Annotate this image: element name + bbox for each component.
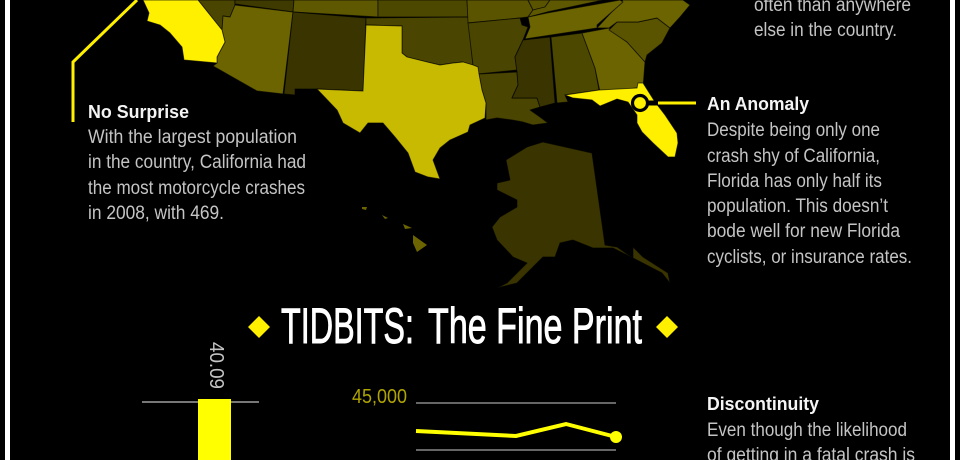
section heading: Tidbits: TIDBITS:: [281, 298, 414, 354]
callout: No Surprise: No Surprise: [88, 101, 189, 122]
state: Mississippi: [512, 37, 555, 107]
state: California: [143, 0, 225, 63]
bar chart: 40.09: [205, 342, 227, 389]
state: Arkansas: [468, 18, 528, 74]
state: Georgia: [582, 28, 645, 92]
state: Louisiana: [479, 72, 548, 125]
text block: top right fragment: else in the country.: [754, 20, 897, 41]
left white frame border: [5, 0, 10, 460]
state: Alaska: [492, 142, 670, 288]
state: Alabama: [551, 33, 599, 103]
callout: An Anomaly: cyclists, or insurance rates.: [707, 247, 912, 268]
state: Arizona: [213, 5, 293, 94]
callout: No Surprise: [88, 101, 306, 224]
bar chart: [142, 342, 259, 460]
state: Utah: [235, 0, 294, 12]
callout: An Anomaly: Despite being only one: [707, 120, 880, 141]
callout: No Surprise: With the largest population: [88, 127, 297, 148]
state: Kentucky: [528, 0, 603, 17]
callout: No Surprise: in 2008, with 469.: [88, 203, 224, 224]
callout: No Surprise: the most motorcycle crashes: [88, 178, 305, 199]
state: Hawaii: [362, 207, 427, 252]
callout: An Anomaly: [707, 93, 912, 268]
callout leader line: California: [73, 0, 137, 122]
state: Nevada: [198, 0, 235, 30]
callout: An Anomaly: Florida has only half its: [707, 171, 882, 192]
line chart: [352, 386, 622, 450]
callout: Discontinuity: Discontinuity: [707, 393, 820, 414]
callout: An Anomaly: An Anomaly: [707, 93, 810, 114]
state: Tennessee: [525, 0, 623, 39]
state: New Mexico: [284, 12, 366, 95]
state: North Carolina: [597, 0, 690, 28]
line chart: 45,000: [352, 386, 407, 408]
state: Oklahoma: [366, 17, 473, 65]
state: Texas: [317, 25, 486, 179]
state: Illinois: [528, 0, 550, 10]
state: Missouri: [467, 0, 533, 23]
callout: An Anomaly: crash shy of California,: [707, 146, 880, 167]
state: Kansas: [378, 0, 468, 17]
state: Florida: [565, 83, 678, 157]
state: South Carolina: [609, 18, 670, 62]
state: Colorado: [293, 0, 378, 17]
callout: Discontinuity: Even though the likelihood: [707, 420, 907, 441]
map of US states by crash count: [143, 0, 690, 288]
callout marker and leader line: Florida: [632, 96, 696, 110]
right white frame border: [950, 0, 955, 460]
section heading: Tidbits: [248, 298, 678, 354]
text block: top right fragment: [754, 0, 911, 41]
callout: An Anomaly: bode well for new Florida: [707, 221, 900, 242]
callout: An Anomaly: population. This doesn’t: [707, 196, 889, 217]
callout: Discontinuity: [707, 393, 915, 460]
section heading: Tidbits: The Fine Print: [428, 298, 642, 354]
callout: No Surprise: in the country, California had: [88, 152, 306, 173]
